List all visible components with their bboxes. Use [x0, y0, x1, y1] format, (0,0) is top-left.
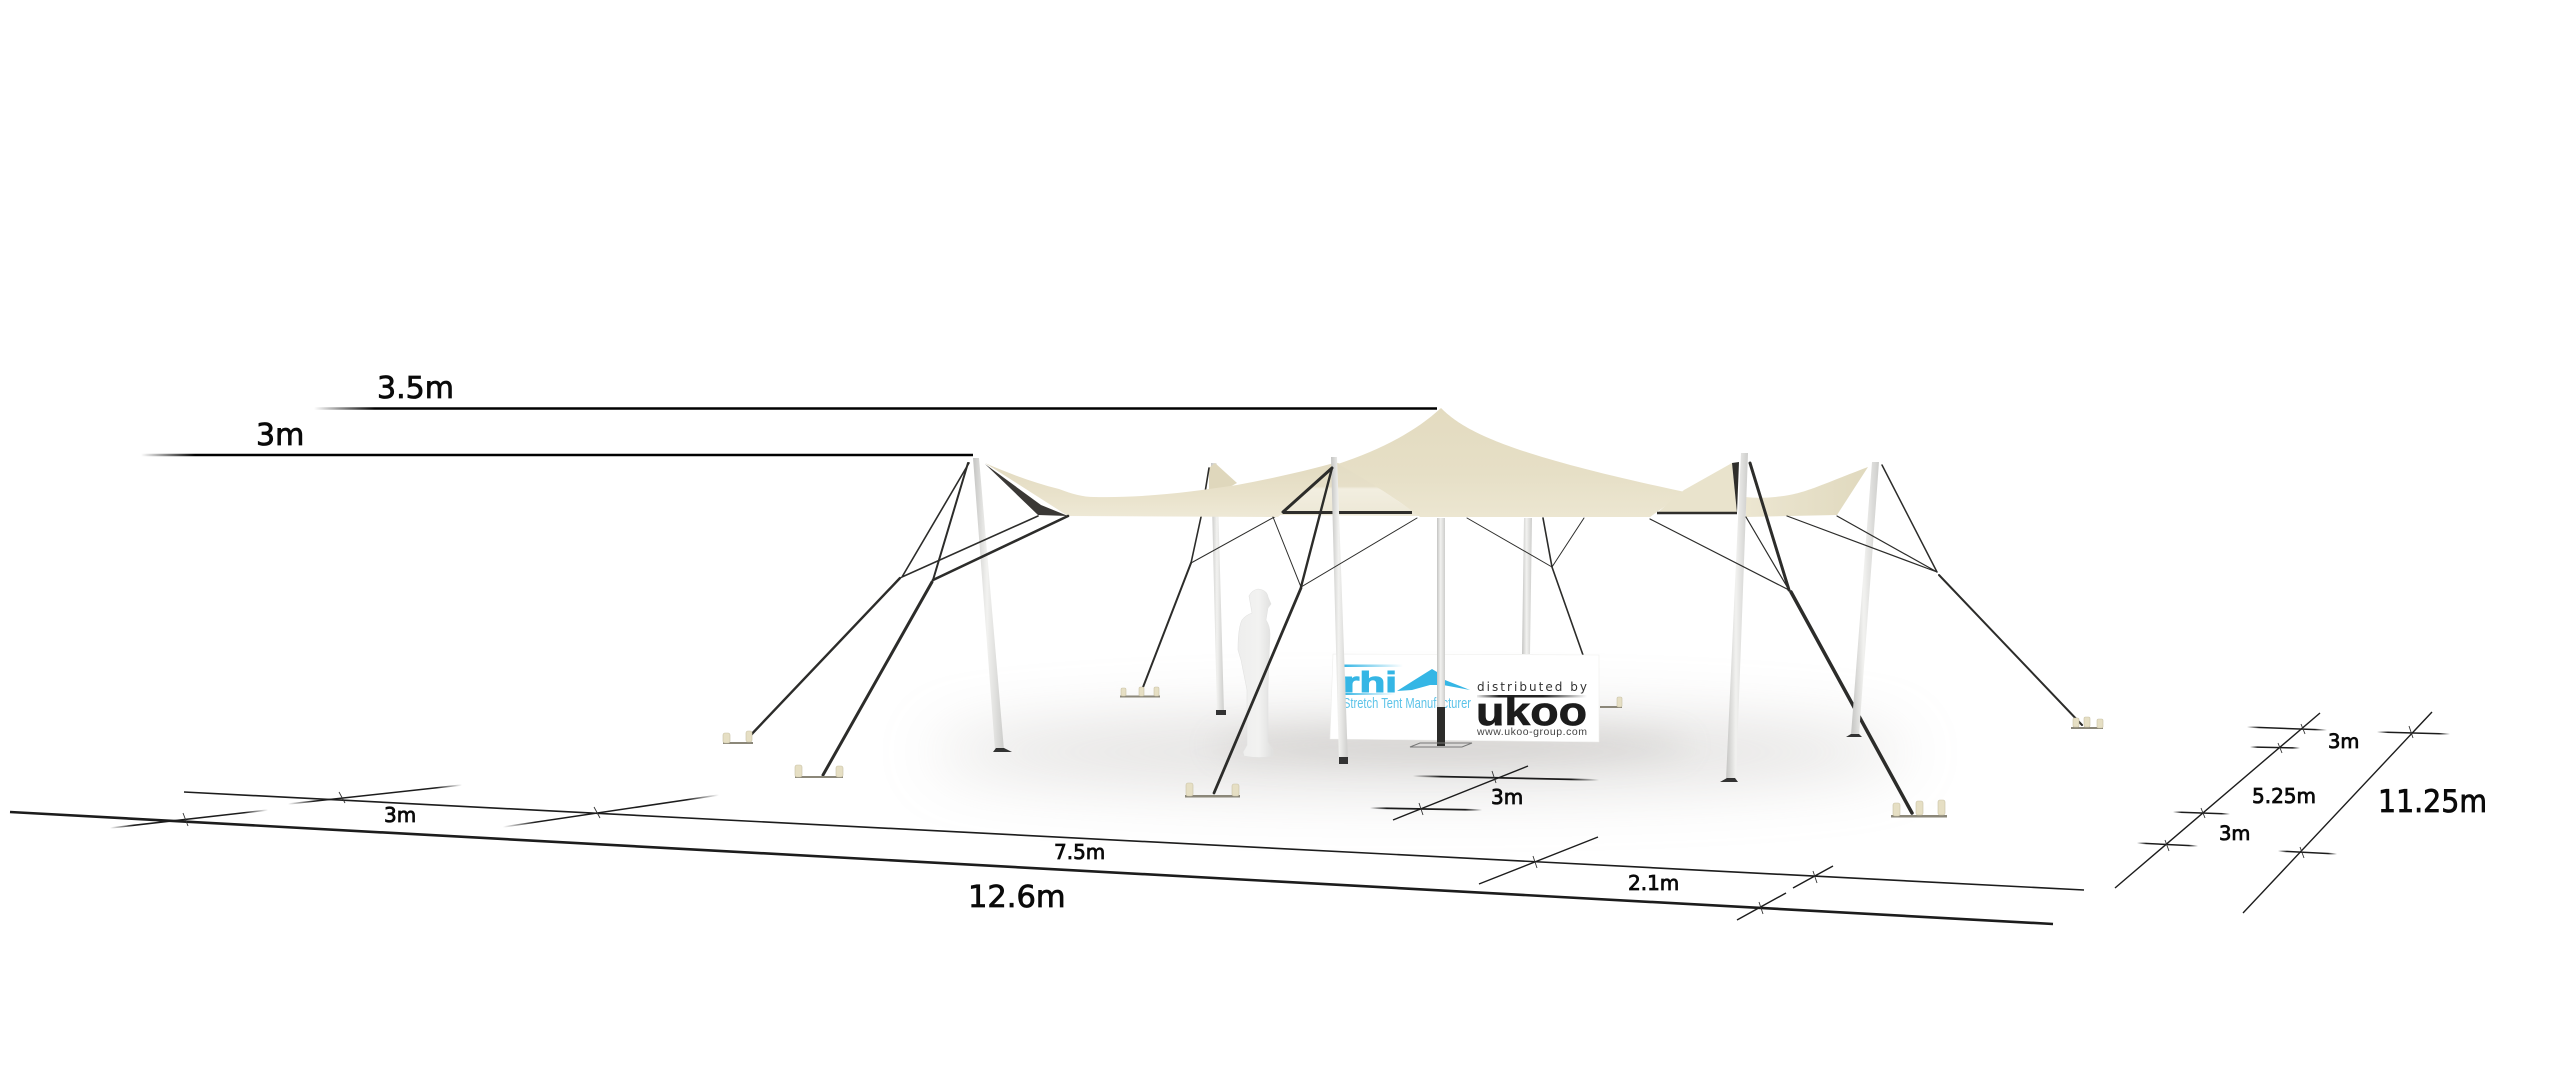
distributed by: distributed by	[1477, 680, 1587, 694]
central 3m dimension	[1370, 766, 1599, 820]
rhi logo wordmark: rhi	[1343, 667, 1397, 699]
front-left corner assembly: pole, ropes, anchors	[723, 458, 1068, 778]
rhi logo mountain	[1397, 669, 1470, 691]
depth dimension: 11.25m overall: 11.25m	[2378, 784, 2487, 820]
length dimensions: 3m, 7.5m, 2.1m: 7.5m	[1054, 840, 1105, 864]
flap dark hem	[1732, 462, 1739, 513]
main peak panel	[1338, 408, 1685, 517]
length dimensions: 3m, 7.5m, 2.1m	[184, 785, 2084, 895]
ukoo url: www.ukoo-group.com	[1476, 726, 1587, 738]
left lobe	[985, 463, 1334, 517]
far-right pole assembly	[1787, 462, 2103, 737]
central 3m dimension: 3m	[1491, 785, 1523, 809]
back poles and back guy ropes	[1120, 463, 1622, 715]
depth dimension: 3m, 5.25m, 3m: 3m	[2219, 822, 2250, 845]
centre pole	[1410, 518, 1472, 747]
length dimension: 12.6m overall	[10, 810, 2053, 924]
height dimension: 3m: 3m	[256, 418, 304, 453]
length dimensions: 3m, 7.5m, 2.1m: 3m	[384, 803, 416, 827]
left dark hem	[985, 464, 1068, 516]
tent canopy	[985, 408, 1868, 517]
ukoo wordmark: ukoo	[1476, 690, 1587, 734]
length dimensions: 3m, 7.5m, 2.1m: 2.1m	[1628, 871, 1679, 895]
front-right pole assembly	[1650, 453, 1947, 818]
rhi tagline: Stretch Tent Manufacturer	[1343, 695, 1471, 712]
front-centre-left pole assembly	[1185, 457, 1417, 798]
banner: rhi + ukoo logos	[1330, 654, 1599, 742]
person figure	[1238, 589, 1273, 758]
depth dimension: 3m, 5.25m, 3m: 5.25m	[2252, 784, 2316, 808]
ground shadow under tent	[930, 718, 1910, 786]
depth dimension: 3m, 5.25m, 3m	[2115, 713, 2359, 888]
height dimension: 3.5m: 3.5m	[377, 371, 454, 406]
inner underside	[1278, 462, 1420, 516]
length dimension: 12.6m overall: 12.6m	[968, 880, 1066, 915]
depth dimension: 11.25m overall	[2243, 712, 2487, 913]
front right flap	[1657, 463, 1737, 513]
right rear lobe	[1745, 467, 1868, 517]
depth dimension: 3m, 5.25m, 3m: 3m	[2328, 730, 2359, 753]
